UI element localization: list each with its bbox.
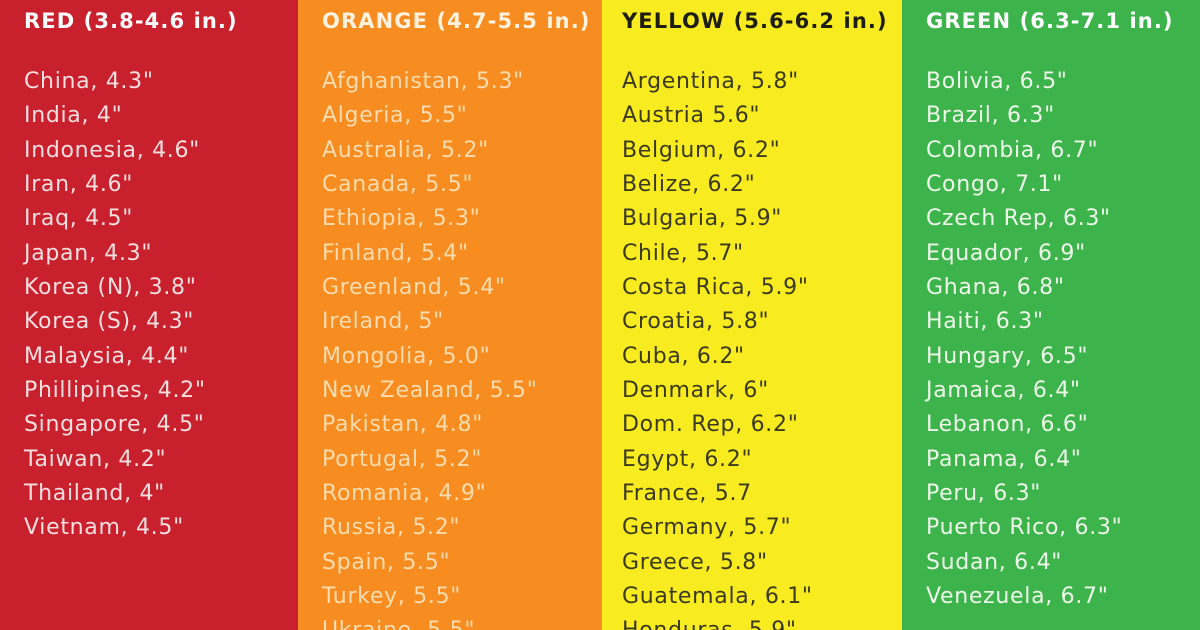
list: yellow countries: France, 5.7 <box>622 481 752 506</box>
list: green countries: Colombia, 6.7" <box>926 138 1098 163</box>
list: green countries: Brazil, 6.3" <box>926 103 1055 128</box>
heading: orange: ORANGE (4.7-5.5 in.) <box>322 9 590 33</box>
list: red countries: Iran, 4.6" <box>24 172 133 197</box>
list: orange countries: Ireland, 5" <box>322 309 444 334</box>
list: yellow countries: Egypt, 6.2" <box>622 447 752 472</box>
list: green countries: Equador, 6.9" <box>926 241 1086 266</box>
list: yellow countries: Costa Rica, 5.9" <box>622 275 809 300</box>
list: orange countries: Afghanistan, 5.3" <box>322 69 524 94</box>
panel: yellow <box>602 0 902 630</box>
list: green countries: Peru, 6.3" <box>926 481 1041 506</box>
list: red countries: Thailand, 4" <box>24 481 165 506</box>
list: green countries: Sudan, 6.4" <box>926 550 1062 575</box>
list: yellow countries: Belize, 6.2" <box>622 172 755 197</box>
heading: green: GREEN (6.3-7.1 in.) <box>926 9 1174 33</box>
list: red countries: Indonesia, 4.6" <box>24 138 200 163</box>
list: orange countries: Spain, 5.5" <box>322 550 450 575</box>
list: yellow countries: Bulgaria, 5.9" <box>622 206 782 231</box>
list: green countries: Ghana, 6.8" <box>926 275 1065 300</box>
list: green countries: Panama, 6.4" <box>926 447 1082 472</box>
heading: yellow: YELLOW (5.6-6.2 in.) <box>622 9 888 33</box>
list: red countries: Japan, 4.3" <box>24 241 152 266</box>
list: green countries: Venezuela, 6.7" <box>926 584 1109 609</box>
list: orange countries: Ethiopia, 5.3" <box>322 206 480 231</box>
list: red countries: Phillipines, 4.2" <box>24 378 206 403</box>
list: red countries: China, 4.3" <box>24 69 154 94</box>
list: red countries: Vietnam, 4.5" <box>24 515 184 540</box>
list: red countries: India, 4" <box>24 103 122 128</box>
list: yellow countries: Guatemala, 6.1" <box>622 584 813 609</box>
list: orange countries: Finland, 5.4" <box>322 241 469 266</box>
list: orange countries: Greenland, 5.4" <box>322 275 506 300</box>
list: yellow countries: Argentina, 5.8" <box>622 69 799 94</box>
list: yellow countries <box>622 69 813 630</box>
list: yellow countries: Cuba, 6.2" <box>622 344 745 369</box>
list: green countries: Puerto Rico, 6.3" <box>926 515 1122 540</box>
list: orange countries: Romania, 4.9" <box>322 481 486 506</box>
list: green countries: Jamaica, 6.4" <box>926 378 1081 403</box>
list: orange countries: Portugal, 5.2" <box>322 447 482 472</box>
list: green countries: Haiti, 6.3" <box>926 309 1044 334</box>
list: green countries <box>924 69 1122 609</box>
list: orange countries: Pakistan, 4.8" <box>322 412 483 437</box>
list: yellow countries: Denmark, 6" <box>622 378 769 403</box>
list: green countries: Lebanon, 6.6" <box>926 412 1088 437</box>
list: red countries: Korea (N), 3.8" <box>24 275 197 300</box>
list: red countries: Iraq, 4.5" <box>24 206 133 231</box>
list: yellow countries: Austria 5.6" <box>622 103 760 128</box>
list: yellow countries: Greece, 5.8" <box>622 550 768 575</box>
list: orange countries: Mongolia, 5.0" <box>322 344 490 369</box>
heading: red: RED (3.8-4.6 in.) <box>24 9 238 33</box>
list: red countries: Korea (S), 4.3" <box>24 309 194 334</box>
list: orange countries: Russia, 5.2" <box>322 515 460 540</box>
list: orange countries: New Zealand, 5.5" <box>322 378 538 403</box>
list: yellow countries: Belgium, 6.2" <box>622 138 780 163</box>
list: yellow countries: Croatia, 5.8" <box>622 309 769 334</box>
list: yellow countries: Chile, 5.7" <box>622 241 744 266</box>
list: orange countries: Algeria, 5.5" <box>322 103 468 128</box>
list: red countries <box>22 69 206 540</box>
list: yellow countries: Dom. Rep, 6.2" <box>622 412 799 437</box>
panel: orange <box>298 0 602 630</box>
panel: red <box>0 0 298 630</box>
list: orange countries: Canada, 5.5" <box>322 172 473 197</box>
list: yellow countries: Germany, 5.7" <box>622 515 791 540</box>
list: green countries: Bolivia, 6.5" <box>926 69 1068 94</box>
list: green countries: Hungary, 6.5" <box>926 344 1088 369</box>
panel: green <box>902 0 1200 630</box>
list: red countries: Taiwan, 4.2" <box>24 447 166 472</box>
list: green countries: Czech Rep, 6.3" <box>926 206 1111 231</box>
list: red countries: Malaysia, 4.4" <box>24 344 189 369</box>
list: orange countries: Australia, 5.2" <box>322 138 489 163</box>
list: green countries: Congo, 7.1" <box>926 172 1063 197</box>
list: orange countries <box>322 69 538 630</box>
list: orange countries: Turkey, 5.5" <box>322 584 461 609</box>
list: red countries: Singapore, 4.5" <box>24 412 205 437</box>
